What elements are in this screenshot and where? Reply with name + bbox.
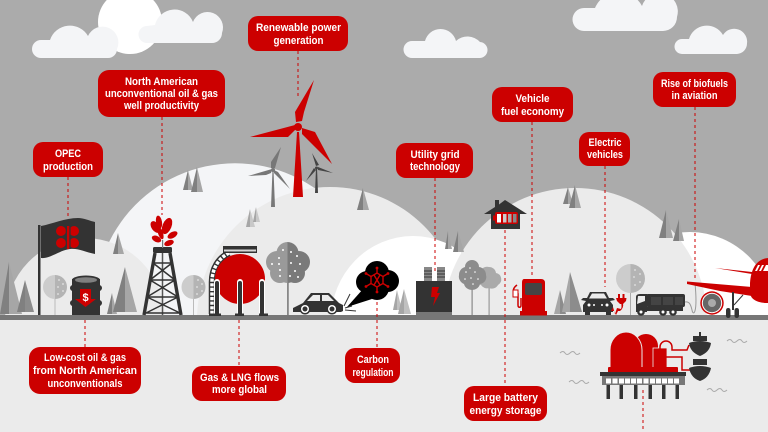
hill: back large — [95, 163, 375, 320]
callout: Electric vehicles — [579, 132, 630, 166]
conifer trees — [0, 167, 684, 314]
icon: fuel pump — [513, 279, 547, 316]
icon: house with battery — [484, 200, 527, 229]
icon: OPEC flag — [38, 218, 95, 315]
ground — [0, 320, 768, 432]
callout: Rise of biofuels: Rise of biofuels — [661, 78, 728, 90]
callout: North American productivity — [98, 70, 225, 117]
callout: Low-cost oil and gas: from North American — [33, 365, 137, 377]
icon: small wind turbine left — [248, 147, 290, 207]
waves — [560, 340, 747, 392]
hill: centre — [197, 187, 463, 320]
icon: carbon cloud — [347, 261, 399, 307]
callout: Large battery storage: Large battery — [473, 392, 538, 404]
callout: Renewable power: generation — [274, 35, 324, 47]
icon: offshore platform — [600, 332, 690, 399]
callout: Gas and LNG flows — [192, 366, 286, 401]
icon: LNG sphere tank — [209, 246, 268, 316]
callout: North American productivity: North American — [125, 76, 198, 88]
icon: electric car front — [581, 292, 615, 315]
callout: Low-cost oil and gas — [29, 347, 141, 394]
oil splash — [148, 215, 179, 248]
cloud 5 — [674, 26, 747, 54]
hills — [5, 163, 768, 320]
cloud 3 — [572, 0, 678, 31]
callout: OPEC production: OPEC — [55, 148, 81, 160]
callout: Renewable power — [248, 16, 348, 51]
icon: oil barrel — [70, 276, 102, 315]
ground line — [0, 315, 768, 320]
callout: North American productivity: unconventional oil & gas — [105, 88, 218, 100]
cloud 2 — [138, 10, 223, 43]
callout: OPEC production — [33, 142, 103, 177]
icon: cluster trees — [459, 260, 501, 315]
hill: far left — [5, 238, 165, 320]
icon: car — [293, 293, 356, 315]
callout: Utility grid: technology — [410, 161, 460, 173]
callout: Utility grid: Utility grid — [410, 149, 460, 161]
dashed connectors — [68, 51, 695, 432]
callout: Vehicle fuel economy: fuel economy — [501, 106, 564, 118]
callout: Vehicle fuel economy: Vehicle — [516, 93, 550, 105]
callout: Electric vehicles: vehicles — [587, 149, 623, 161]
icon: round tree centre — [182, 275, 206, 315]
callout: Vehicle fuel economy — [492, 87, 573, 122]
callout: Carbon regulation — [345, 348, 400, 383]
callout: Utility grid — [396, 143, 473, 178]
callout: Electric vehicles: Electric — [588, 137, 622, 149]
icon: tanker truck — [636, 283, 696, 316]
icon: large wind turbine — [250, 80, 332, 197]
icon: clover tree — [266, 242, 310, 315]
icon: airplane — [687, 258, 768, 318]
callout: OPEC production: production — [43, 161, 93, 173]
hill: front white — [331, 236, 495, 320]
callout: Large battery storage: energy storage — [470, 405, 542, 417]
icon: round tree right — [616, 264, 645, 315]
callout: North American productivity: well productivity — [123, 100, 199, 112]
cloud 1 — [32, 26, 118, 58]
callout: Carbon regulation: regulation — [352, 367, 394, 379]
cloud 4 — [404, 29, 488, 58]
callout: Large battery storage — [464, 386, 547, 421]
icon: electric plug — [611, 294, 626, 315]
callout: Rise of biofuels — [653, 72, 736, 107]
hill: back right — [605, 232, 768, 320]
icon: round tree left — [43, 275, 67, 315]
callout: Gas and LNG flows: Gas & LNG flows — [200, 372, 279, 384]
callout: Low-cost oil and gas: unconventionals — [48, 378, 123, 390]
callout: Low-cost oil and gas: Low-cost oil & gas — [44, 352, 126, 364]
icon: tanker ship lower — [689, 359, 711, 381]
icon: transformer — [416, 267, 452, 315]
callout: Rise of biofuels: in aviation — [672, 90, 718, 102]
callout: Gas and LNG flows: more global — [212, 384, 267, 396]
sun — [98, 0, 162, 54]
icon: oil barrel: $ — [82, 292, 89, 304]
hill: right large — [443, 188, 707, 320]
icon: tanker ship upper — [689, 332, 711, 356]
clouds — [32, 0, 747, 58]
callout: Renewable power: Renewable power — [256, 22, 341, 34]
icon: oil derrick — [144, 215, 181, 315]
icon: small wind turbine right — [306, 153, 333, 193]
callout: Carbon regulation: Carbon — [357, 354, 389, 366]
